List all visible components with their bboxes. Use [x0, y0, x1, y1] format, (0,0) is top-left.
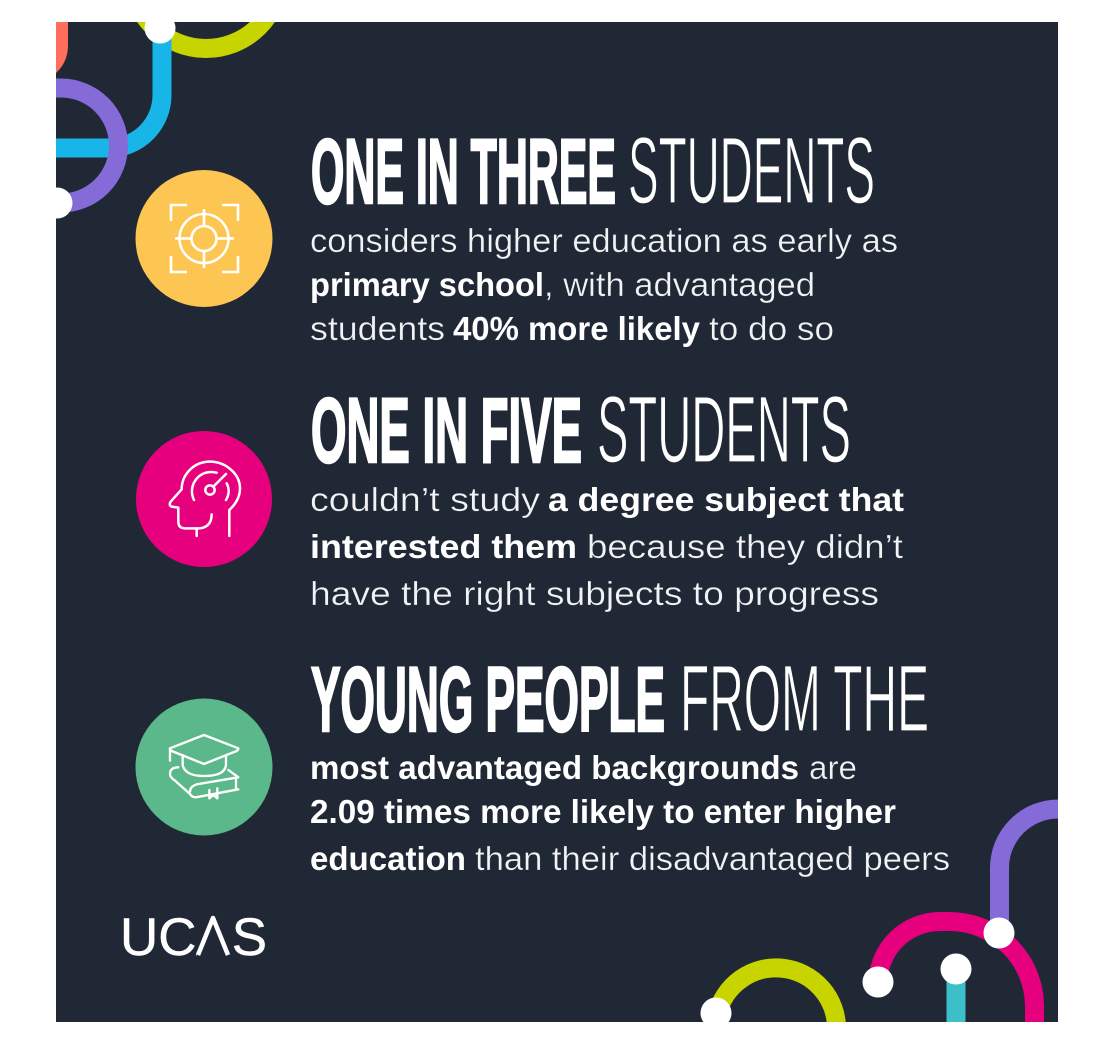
text block: stat one: considers higher education as early as — [310, 222, 898, 259]
text block: stat two: a degree subject that — [548, 481, 904, 518]
text block: stat three: than their disadvantaged peers — [475, 840, 950, 877]
text block: stat two — [310, 481, 904, 612]
text block: stat one: primary school — [310, 266, 544, 303]
text block: stat two: couldn’t study — [310, 481, 541, 518]
text block: stat three: education — [310, 840, 466, 877]
text block: stat two: because they didn’t — [587, 528, 903, 565]
text block: stat one: , with advantaged — [544, 266, 815, 303]
text: STUDENTS — [597, 377, 851, 483]
logo: UCAS: UCAS — [120, 908, 267, 967]
top-left decorative lines — [56, 22, 275, 218]
text block: stat two: interested them — [310, 528, 577, 565]
icon: graduation cap and book — [136, 698, 272, 836]
text block: stat one — [310, 222, 898, 347]
text block: stat three — [310, 749, 950, 877]
heading: young people from the: YOUNG PEOPLE — [311, 649, 665, 751]
icon: head with gauge — [136, 431, 272, 567]
icon: target — [136, 170, 272, 307]
text block: stat two: have the right subjects to progress — [310, 575, 879, 612]
text block: stat one: students — [310, 310, 445, 347]
text block: stat three: most advantaged backgrounds — [310, 749, 799, 786]
text block: stat three: are — [809, 749, 857, 786]
text block: stat one: 40% more likely — [453, 310, 701, 347]
text block: stat one: to do so — [709, 310, 834, 347]
text block: stat three: 2.09 times more likely to enter higher — [310, 793, 896, 830]
bottom-right decorative lines — [700, 809, 1058, 1030]
heading: one in three students: ONE IN THREE — [311, 121, 616, 223]
heading: one in five students: ONE IN FIVE — [311, 380, 582, 482]
